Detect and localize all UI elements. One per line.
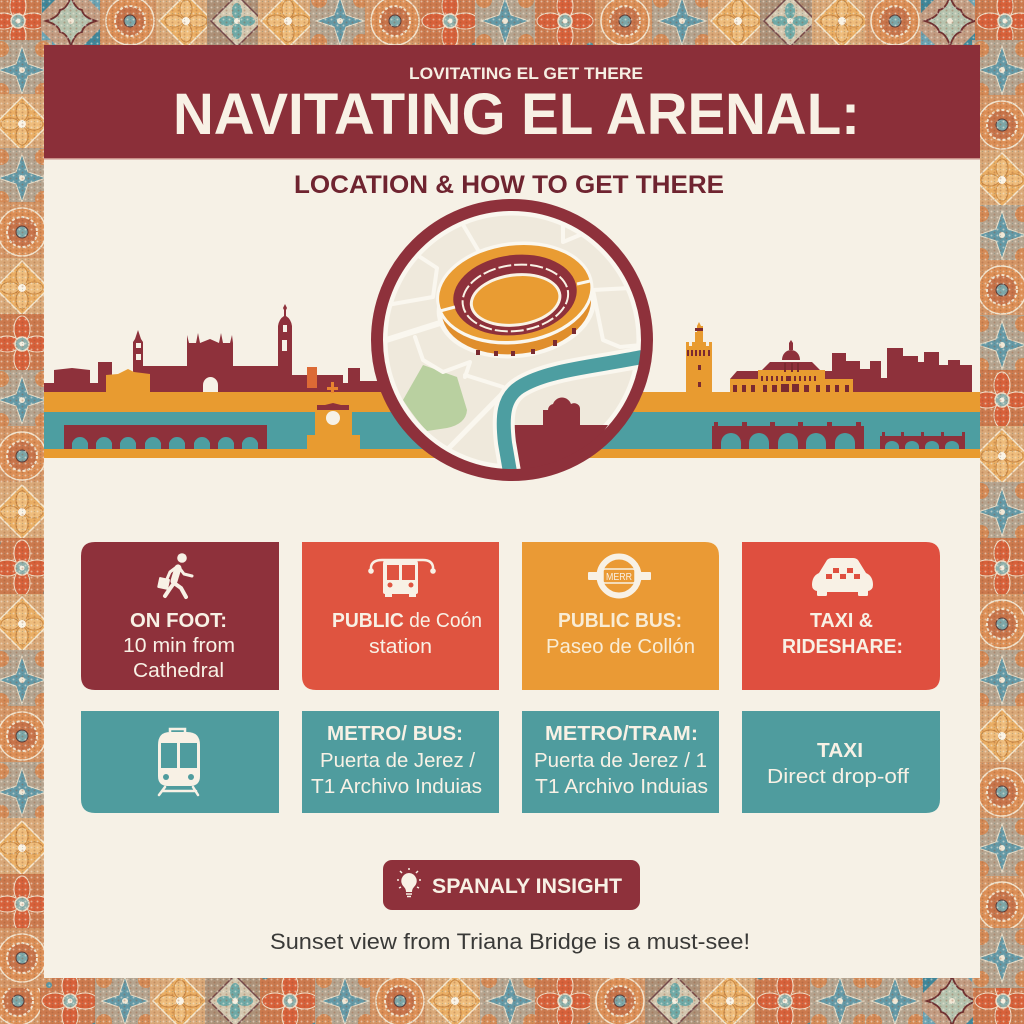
left stone bridge — [64, 425, 267, 449]
card: metro bus: T1 Archivo Induias — [311, 776, 482, 798]
kicker text: LOVITATING EL GET THERE — [409, 64, 643, 83]
transport options grid — [81, 542, 940, 813]
left skyline silhouette — [44, 304, 385, 392]
text: station — [369, 636, 432, 658]
text: TAXI & — [810, 610, 873, 632]
park — [403, 365, 467, 431]
subtitle: LOCATION & HOW TO GET THERE — [294, 171, 724, 199]
header banner — [44, 45, 980, 160]
icon: bus — [368, 559, 436, 597]
right large bridge — [712, 422, 864, 449]
card: train icon — [81, 711, 279, 813]
card: taxi — [742, 711, 940, 813]
river — [504, 357, 642, 472]
text — [123, 610, 235, 682]
icon: train — [158, 729, 200, 795]
text — [332, 610, 482, 658]
text: PUBLIC BUS: — [558, 610, 682, 632]
card: metro tram: METRO/TRAM: — [545, 723, 698, 745]
insight badge — [383, 860, 640, 910]
city skyline and river band — [44, 304, 980, 458]
card: metro tram — [522, 711, 719, 813]
text: PUBLIC de Coón — [332, 610, 482, 632]
giralda tower — [686, 322, 712, 392]
card: on foot — [81, 542, 279, 690]
card: metro tram: Puerta de Jerez / 1 — [534, 750, 707, 772]
text: 10 min from — [123, 635, 235, 657]
main title: NAVITATING EL ARENAL: — [173, 82, 860, 147]
text: Paseo de Collón — [546, 636, 695, 658]
card: taxi and rideshare — [742, 542, 940, 690]
icon: walker — [157, 553, 192, 597]
card: public station — [302, 542, 499, 690]
icon: metro roundel: MERR — [606, 572, 632, 583]
text — [546, 610, 695, 658]
card: public bus — [522, 542, 719, 690]
text — [782, 610, 903, 658]
text: ON FOOT: — [130, 610, 227, 632]
card: metro tram: T1 Archivo Induias — [535, 776, 708, 798]
bullring stadium — [436, 242, 594, 358]
insight note: Sunset view from Triana Bridge is a must-see! — [270, 929, 750, 954]
arena windows — [476, 328, 576, 356]
right small bridge — [880, 432, 965, 449]
text: Cathedral — [133, 660, 224, 682]
card: taxi: TAXI — [817, 740, 863, 762]
map ring — [377, 205, 647, 475]
card: metro bus: Puerta de Jerez / — [320, 750, 475, 772]
card: metro bus: METRO/ BUS: — [327, 723, 463, 745]
text: RIDESHARE: — [782, 636, 903, 658]
card: taxi: Direct drop-off — [767, 766, 909, 788]
circular map with bullring — [377, 205, 647, 475]
streets — [380, 213, 642, 467]
right skyline blocks — [832, 348, 972, 392]
river bands — [44, 392, 980, 458]
orange monument — [307, 382, 360, 458]
icon: metro roundel — [588, 556, 651, 596]
card: metro bus — [302, 711, 499, 813]
map contents — [380, 210, 642, 472]
icon: taxi — [812, 558, 873, 596]
badge label: SPANALY INSIGHT — [432, 875, 622, 898]
icon: light bulb — [397, 868, 421, 896]
lower-right district — [512, 398, 608, 470]
domed palace — [730, 340, 853, 392]
